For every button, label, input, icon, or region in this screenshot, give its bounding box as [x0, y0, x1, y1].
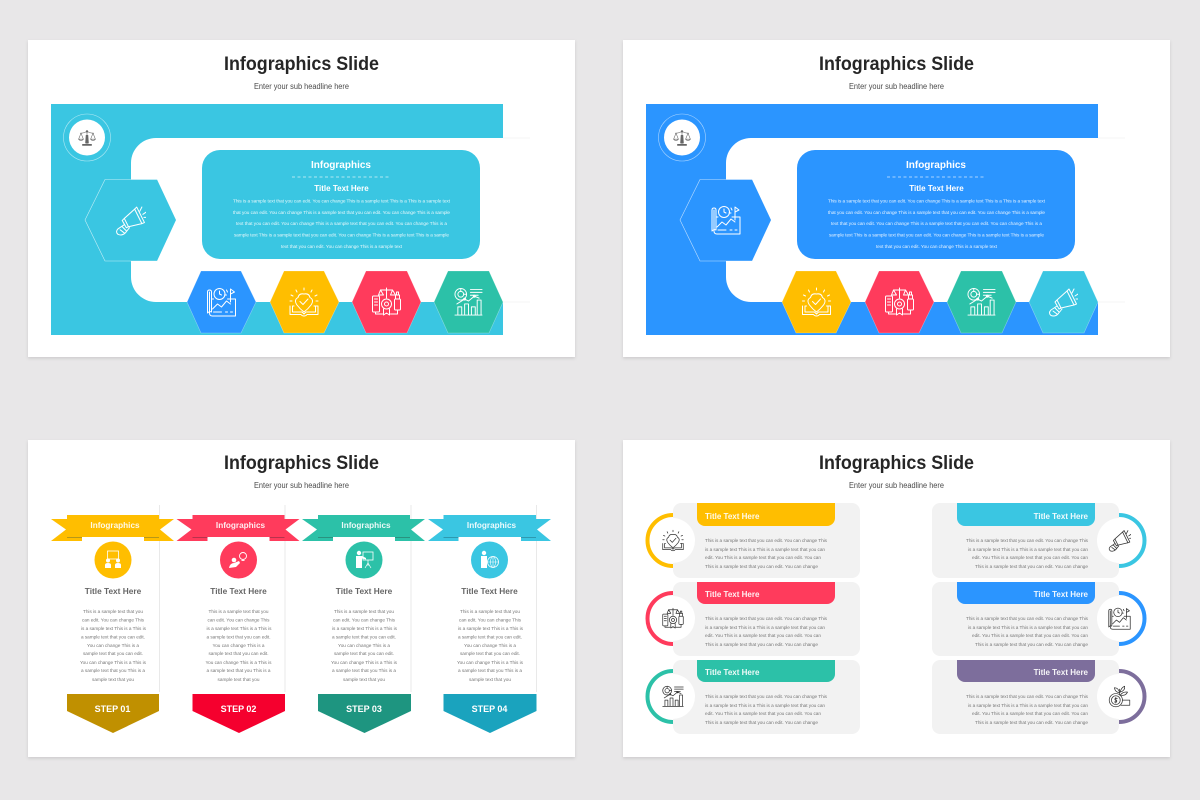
body text: sample text that you	[92, 677, 134, 682]
hexagon: award	[865, 271, 934, 333]
card: purple: This is a sample text that you can edit. You can change	[975, 720, 1088, 725]
body text: is a sample text This is a This is	[458, 626, 524, 631]
body text: This is a sample text that you	[83, 609, 143, 614]
card: teal: is a sample text This is a This is a sample text that you can	[705, 703, 825, 708]
icon: scales badge	[658, 114, 706, 161]
panel: slide 1 cyan hexagon process	[28, 40, 575, 357]
card: yellow	[648, 503, 860, 578]
body text	[80, 609, 147, 682]
card: cyan: Title Text Here	[1034, 512, 1089, 521]
step 3 column: STEP 03	[346, 704, 382, 714]
hexagon: chart	[947, 271, 1016, 333]
card: blue: This is a sample text that you can edit. You can change This	[966, 616, 1089, 621]
card: purple: Title Text Here	[1034, 668, 1089, 677]
icon: map ring	[1097, 593, 1144, 644]
card: yellow: is a sample text This is a This is a sample text that you can	[705, 547, 825, 552]
card: teal: edit. You This is a sample text that you can edit. You can	[705, 711, 821, 716]
body text: a sample text that you can edit.	[458, 634, 522, 640]
body text: sample text that you can edit.	[460, 651, 520, 656]
subtitle: Enter your sub headline here	[849, 82, 945, 91]
icon: book ring	[648, 515, 695, 566]
body text: is a sample text This is a This is	[332, 626, 398, 631]
large hexagon with megaphone	[85, 180, 176, 261]
card: cyan: edit. You This is a sample text that you can edit. You can	[972, 555, 1088, 560]
cyan backdrop with cutout	[51, 104, 503, 335]
card: red: is a sample text This is a This is a sample text that you can	[705, 625, 825, 630]
card: cyan: This is a sample text that you can edit. You can change This	[966, 538, 1089, 543]
card: blue: Title Text Here	[1034, 590, 1089, 599]
card: red: This is a sample text that you can edit. You can change This	[705, 616, 828, 621]
body text: sample text that you can edit.	[334, 651, 394, 656]
text panel: sample text This is a sample text that you can edit. You can change This is a sample text This is a sample	[829, 232, 1044, 238]
card: cyan: is a sample text This is a This is a sample text that you can	[968, 547, 1088, 552]
body text: a sample text that you can edit.	[81, 634, 145, 640]
text panel: Infographics	[311, 160, 371, 171]
body text: sample text that you	[343, 677, 385, 682]
card: purple: is a sample text This is a This is a sample text that you can	[968, 703, 1088, 708]
text panel: This is a sample text that you can edit. You can change This is a sample text This is a This is a sample text	[233, 198, 451, 204]
body text	[457, 609, 524, 682]
card: teal: This is a sample text that you can edit. You can change	[705, 720, 818, 725]
step 4 column	[428, 515, 551, 733]
body text: is a sample text This is a This is	[206, 626, 272, 631]
body text: This is a sample text that you	[334, 609, 394, 614]
card: red: This is a sample text that you can edit. You can change	[705, 642, 818, 647]
ribbon	[51, 515, 174, 541]
icon: award ring	[648, 593, 695, 644]
body text: You can change This is a	[338, 643, 390, 648]
icon: scales badge	[64, 114, 110, 161]
hexagon: book	[270, 271, 339, 333]
card: blue: edit. You This is a sample text that you can edit. You can	[972, 633, 1088, 638]
card: teal	[648, 660, 860, 734]
step 4 column: STEP 04	[472, 704, 507, 714]
body text: You can change This is a This is	[457, 660, 524, 665]
subtitle: Enter your sub headline here	[849, 481, 945, 490]
step 3 column: Infographics	[341, 521, 391, 530]
panel: slide 2 blue hexagon process	[623, 40, 1170, 357]
card: red: edit. You This is a sample text that you can edit. You can	[705, 633, 821, 638]
card: red: Title Text Here	[705, 590, 760, 599]
text panel: Infographics	[906, 160, 966, 171]
body text: You can change This is a	[464, 643, 516, 648]
hexagon: map	[187, 271, 256, 333]
step 2 column: Infographics	[216, 521, 266, 530]
ribbon	[428, 515, 551, 541]
step 2 column	[176, 515, 300, 733]
card: yellow: edit. You This is a sample text that you can edit. You can	[705, 555, 821, 560]
step 2 column: Title Text Here	[210, 586, 267, 596]
text panel: text that you can edit. You can change This is a sample text that you can edit. You can change This is a	[831, 221, 1042, 226]
text panel: Title Text Here	[314, 184, 369, 193]
body text: You can change This is a This is	[206, 660, 272, 665]
body text: can edit. You can change This	[333, 618, 396, 622]
body text: a sample text that you This is a	[206, 668, 271, 673]
body text: You can change This is a This is	[80, 660, 147, 665]
text panel	[797, 150, 1075, 259]
body text: is a sample text This is a This is	[81, 626, 147, 631]
card: yellow: Title Text Here	[705, 512, 760, 521]
title: Infographics Slide	[819, 54, 974, 75]
body text: a sample text that you This is a	[332, 668, 396, 673]
icon: person with globe	[471, 542, 508, 578]
body text: This is a sample text that you	[208, 609, 269, 614]
hexagon: book	[782, 271, 851, 333]
step 1 column: Title Text Here	[85, 586, 142, 596]
card: blue: This is a sample text that you can edit. You can change	[975, 642, 1088, 647]
body text: sample text that you	[218, 677, 260, 682]
card: purple: edit. You This is a sample text that you can edit. You can	[972, 711, 1088, 716]
text panel: that you can edit. You can change This is a sample text that you can edit. You can change This is a sample	[233, 210, 450, 215]
hexagon: megaphone	[1029, 271, 1098, 333]
icon: person with bulb	[220, 542, 257, 578]
text panel: sample text This is a sample text that you can edit. You can change This is a sample text This is a sample	[234, 232, 449, 238]
body text: This is a sample text that you	[460, 609, 520, 614]
body text: sample text that you	[469, 677, 511, 682]
body text: a sample text that you can edit.	[332, 634, 396, 640]
subtitle: Enter your sub headline here	[254, 82, 350, 91]
card: red	[648, 582, 860, 656]
step 3 column	[302, 515, 425, 733]
icon: coin plant ring	[1097, 671, 1144, 722]
body text: can edit. You can change This	[82, 618, 145, 622]
body text	[206, 609, 272, 682]
title: Infographics Slide	[224, 54, 379, 75]
body text: a sample text that you This is a	[458, 668, 522, 673]
body text: a sample text that you can edit.	[206, 634, 270, 640]
icon: team at board	[94, 542, 132, 578]
step 1 column: STEP 01	[95, 704, 130, 714]
body text: can edit. You can change This	[459, 618, 522, 622]
step arrow	[318, 694, 411, 733]
icon: presenter at board	[346, 542, 382, 578]
card: yellow: This is a sample text that you can edit. You can change	[705, 564, 818, 569]
step 1 column	[51, 515, 174, 733]
step 4 column: Infographics	[467, 521, 517, 530]
title: Infographics Slide	[224, 453, 379, 474]
card: cyan: This is a sample text that you can edit. You can change	[975, 564, 1088, 569]
step arrow	[67, 694, 159, 733]
step arrow	[444, 694, 536, 733]
step 1 column: Infographics	[90, 521, 140, 530]
panel: slide 4 six cards	[623, 440, 1170, 757]
text panel: This is a sample text that you can edit. You can change This is a sample text This is a This is a sample text	[828, 198, 1046, 204]
hexagon: chart	[434, 271, 503, 333]
body text: sample text that you can edit.	[208, 651, 268, 656]
text panel: text that you can edit. You can change This is a sample text	[876, 244, 998, 249]
blue backdrop with cutout	[646, 104, 1098, 335]
body text: can edit. You can change This	[208, 618, 270, 622]
ribbon	[176, 515, 300, 541]
text panel: Title Text Here	[909, 184, 964, 193]
hexagon: award	[352, 271, 421, 333]
body text: You can change This is a	[87, 643, 139, 648]
step 3 column: Title Text Here	[336, 586, 393, 596]
text panel: text that you can edit. You can change This is a sample text	[281, 244, 403, 249]
title: Infographics Slide	[819, 453, 974, 474]
body text	[331, 609, 398, 682]
card: teal: This is a sample text that you can edit. You can change This	[705, 694, 828, 699]
large hexagon with map	[680, 180, 771, 261]
text panel: that you can edit. You can change This is a sample text that you can edit. You can change This is a sample	[828, 210, 1045, 215]
icon: megaphone ring	[1097, 515, 1144, 566]
text panel: text that you can edit. You can change This is a sample text that you can edit. You can change This is a	[236, 221, 447, 226]
card: blue: is a sample text This is a This is a sample text that you can	[968, 625, 1088, 630]
card: yellow: This is a sample text that you can edit. You can change This	[705, 538, 828, 543]
step 4 column: Title Text Here	[461, 586, 518, 596]
body text: a sample text that you This is a	[81, 668, 145, 673]
step 2 column: STEP 02	[221, 704, 256, 714]
card: blue	[932, 582, 1144, 656]
icon: chart ring	[648, 671, 695, 722]
step arrow	[192, 694, 285, 733]
ribbon	[302, 515, 425, 541]
text panel	[202, 150, 480, 259]
body text: sample text that you can edit.	[83, 651, 143, 656]
card: purple	[932, 660, 1144, 734]
body text: You can change This is a	[212, 643, 265, 648]
subtitle: Enter your sub headline here	[254, 481, 350, 490]
card: teal: Title Text Here	[705, 668, 760, 677]
panel: slide 3 four step ribbons	[28, 440, 575, 757]
body text: You can change This is a This is	[331, 660, 398, 665]
card: cyan	[932, 503, 1144, 578]
card: purple: This is a sample text that you can edit. You can change This	[966, 694, 1089, 699]
